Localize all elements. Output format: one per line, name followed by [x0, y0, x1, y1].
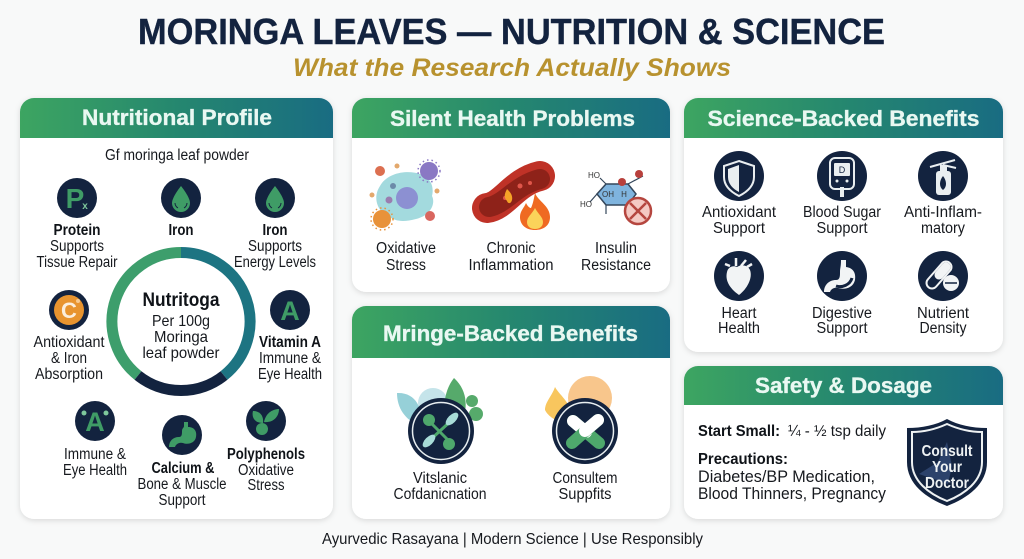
- nutrient: polyphenols: Polyphenols: [227, 446, 305, 463]
- icon: vital leaf medallion: [397, 378, 483, 464]
- subtitle: What the Research Actually Shows: [293, 54, 731, 82]
- nutrient: iron: Iron: [168, 222, 194, 239]
- badge: consult your doctor shield: Your: [932, 459, 962, 476]
- benefit: blood sugar support: D: [839, 165, 846, 175]
- header: science-backed benefits: Science-Backed Benefits: [708, 106, 980, 131]
- icon: oxidative stress cell: [370, 160, 440, 230]
- nutrient: vitamin c: Antioxidant: [34, 334, 105, 351]
- nutrient: immune and eye health: A: [85, 407, 105, 437]
- label: oxidative stress: [376, 240, 436, 274]
- panel: silent health problems: [352, 98, 670, 292]
- nutrient: polyphenols: Oxidative: [238, 462, 294, 479]
- label: insulin resistance: Resistance: [581, 257, 651, 274]
- label: consultem suppfits: Suppfits: [558, 486, 612, 503]
- nutrient: calcium: Calcium &: [152, 460, 214, 477]
- header: nutritional profile: Nutritional Profile: [82, 105, 272, 130]
- nutrient: iron: [161, 178, 201, 239]
- nutrient: vitamin c: & Iron: [51, 350, 87, 367]
- benefit: blood sugar support: Support: [816, 220, 868, 237]
- header: nutritional profile: [20, 98, 333, 138]
- nutrient: vitamin a: A: [280, 296, 300, 326]
- badge: consult your doctor shield: Doctor: [925, 475, 969, 492]
- nutrient: iron energy: [234, 178, 316, 271]
- icon: glucose molecule with cross: H: [621, 190, 627, 199]
- icon: capsule medallion: [545, 376, 618, 464]
- ring centre text: Moringa: [154, 329, 208, 346]
- precautions text: Diabetes/BP Medication,: [698, 467, 875, 486]
- ring centre text: Nutritoga: [142, 290, 220, 311]
- label: consultem suppfits: [552, 470, 618, 503]
- icon: glucose molecule with cross: [580, 170, 651, 224]
- icon: glucose molecule with cross: HO: [580, 200, 592, 209]
- benefit: digestive support: [812, 251, 872, 337]
- precautions text: Precautions:: [698, 451, 788, 468]
- icon: inflamed artery: [487, 176, 550, 230]
- benefit: heart health: Health: [718, 320, 760, 337]
- nutrient: vitamin a: Vitamin A: [259, 334, 321, 351]
- nutrient: vitamin a: Immune &: [259, 350, 322, 367]
- nutrient: calcium: Support: [158, 492, 206, 509]
- ring chart: [112, 252, 250, 391]
- nutrient: calcium: Bone & Muscle: [138, 476, 226, 493]
- header: science-backed benefits: [684, 98, 1003, 138]
- panel: safety and dosage: [684, 366, 1003, 519]
- benefit: anti-inflammatory: Anti-Inflam-: [904, 204, 982, 221]
- benefit: digestive support: Support: [816, 320, 868, 337]
- benefit: blood sugar support: [803, 151, 881, 237]
- panel: mringe-backed benefits: [352, 306, 670, 519]
- precautions text: Blood Thinners, Pregnancy: [698, 484, 886, 503]
- label: vitslanic cofdanicnation: Cofdanicnation: [394, 486, 486, 503]
- nutrient: vitamin c: C: [61, 298, 77, 323]
- benefit: antioxidant support: [702, 151, 777, 237]
- nutrient: protein: P: [66, 183, 84, 214]
- benefit: anti-inflammatory: [904, 151, 982, 237]
- badge: consult your doctor shield: Consult: [922, 443, 973, 460]
- title: MORINGA LEAVES — NUTRITION & SCIENCE: [138, 11, 885, 52]
- label: chronic inflammation: Inflammation: [468, 257, 554, 274]
- benefit: antioxidant support: Support: [713, 220, 766, 237]
- nutrient: iron energy: Supports: [248, 238, 302, 255]
- benefit: nutrient density: Density: [920, 320, 967, 337]
- label: oxidative stress: Stress: [386, 257, 426, 274]
- label: consultem suppfits: Consultem: [552, 470, 618, 487]
- header: silent health problems: [352, 98, 670, 138]
- footer: Ayurvedic Rasayana | Modern Science | Use Responsibly: [322, 531, 703, 548]
- nutrient: calcium: [138, 415, 226, 509]
- nutrient: vitamin a: [258, 290, 322, 383]
- icon: glucose molecule with cross: OH: [602, 190, 614, 199]
- label: chronic inflammation: Chronic: [486, 240, 536, 257]
- nutrient: polyphenols: [227, 401, 305, 494]
- header: silent health problems: Silent Health Problems: [390, 106, 635, 131]
- precautions text: [698, 451, 886, 503]
- benefit: nutrient density: [917, 251, 970, 337]
- nutrient: iron energy: Iron: [262, 222, 288, 239]
- label: insulin resistance: Insulin: [595, 240, 637, 257]
- benefit: blood sugar support: Blood Sugar: [803, 204, 881, 221]
- icon: glucose molecule with cross: HO: [588, 171, 600, 180]
- benefit: anti-inflammatory: matory: [921, 220, 965, 237]
- ring centre text: [142, 290, 220, 362]
- nutrient: immune and eye health: [63, 401, 127, 479]
- nutrient: vitamin c: [34, 290, 105, 383]
- benefit: heart health: Heart: [722, 305, 757, 322]
- label: vitslanic cofdanicnation: Vitslanic: [413, 470, 467, 487]
- ring centre text: Per 100g: [152, 313, 210, 330]
- header: mringe-backed benefits: Mringe-Backed Benefits: [383, 321, 638, 346]
- nutrient: immune and eye health: Eye Health: [63, 462, 127, 479]
- nutrient: polyphenols: Stress: [248, 477, 285, 494]
- benefit: nutrient density: Nutrient: [917, 305, 970, 322]
- header: safety and dosage: [684, 366, 1003, 405]
- nutrient: iron energy: Energy Levels: [234, 254, 316, 271]
- dosage text: Start Small:: [698, 423, 780, 440]
- panel: nutritional profile: [20, 98, 333, 519]
- label: insulin resistance: [581, 240, 651, 274]
- benefit: antioxidant support: Antioxidant: [702, 204, 777, 221]
- ring centre text: leaf powder: [142, 345, 220, 362]
- nutrient: protein: x: [82, 201, 88, 212]
- panel: science-backed benefits: [684, 98, 1003, 352]
- label: oxidative stress: Oxidative: [376, 240, 436, 257]
- badge: consult your doctor shield: [907, 419, 987, 506]
- nutrient: immune and eye health: Immune &: [64, 446, 127, 463]
- nutrient: protein: [36, 178, 118, 271]
- nutrient: protein: Tissue Repair: [36, 254, 118, 271]
- benefit: digestive support: Digestive: [812, 305, 872, 322]
- label: vitslanic cofdanicnation: [394, 470, 486, 503]
- header: safety and dosage: Safety & Dosage: [755, 373, 932, 398]
- subheading: Gf moringa leaf powder: [105, 147, 249, 164]
- nutrient: vitamin a: Eye Health: [258, 366, 322, 383]
- nutrient: protein: Protein: [54, 222, 100, 239]
- benefit: heart health: [714, 251, 764, 337]
- nutrient: protein: Supports: [50, 238, 104, 255]
- dosage text: [698, 423, 886, 440]
- dosage text: ¼ - ½ tsp daily: [788, 423, 886, 440]
- header: mringe-backed benefits: [352, 306, 670, 358]
- nutrient: vitamin c: Absorption: [35, 366, 103, 383]
- label: chronic inflammation: [468, 240, 554, 274]
